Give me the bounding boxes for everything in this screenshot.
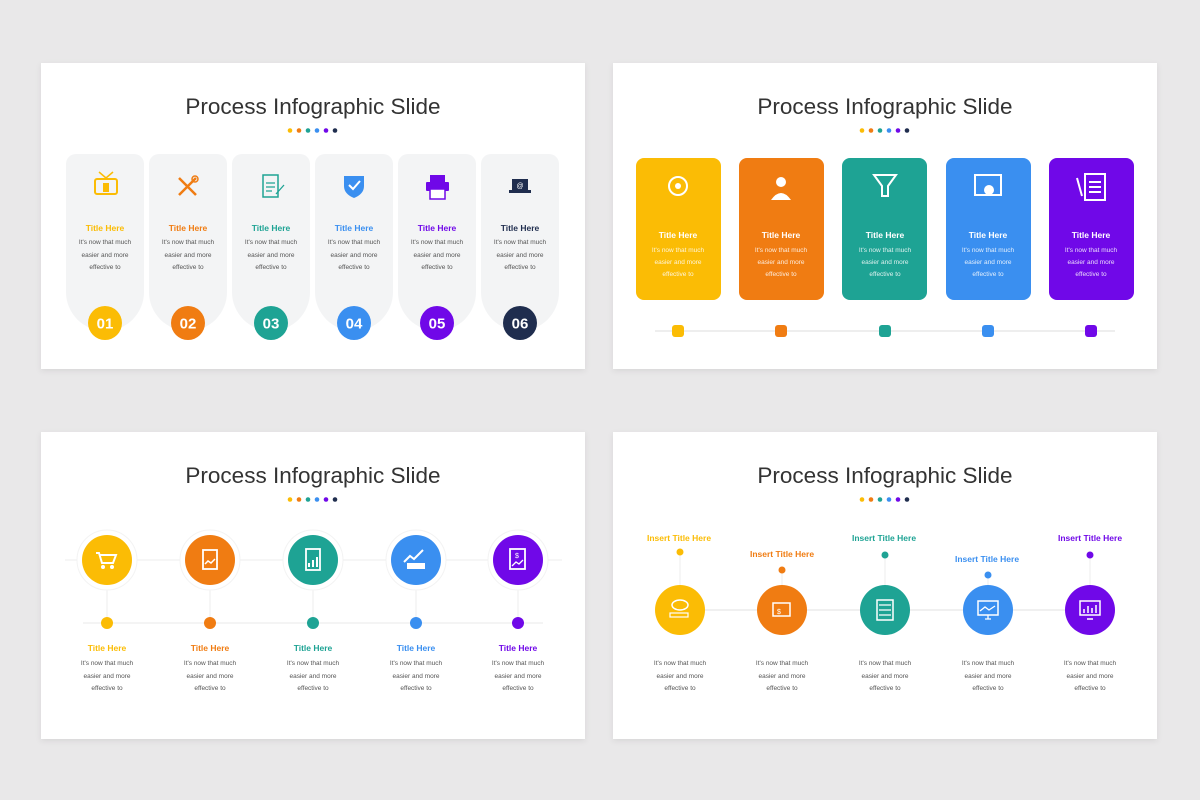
card 1 — [636, 158, 721, 337]
card 5: easier and more — [414, 252, 461, 259]
step 3: easier and more — [862, 673, 909, 680]
card 5: It's now that much — [1065, 247, 1117, 254]
step 2: easier and more — [187, 673, 234, 680]
color dots — [860, 128, 909, 133]
step 4: effective to — [400, 685, 432, 692]
step 5: It's now that much — [492, 660, 544, 667]
step 1: Insert Title Here — [647, 533, 711, 543]
card 2: 02 — [180, 316, 196, 332]
card 6: easier and more — [497, 252, 544, 259]
card 2 — [739, 158, 824, 337]
step 4 — [386, 530, 446, 692]
step 4: It's now that much — [962, 660, 1014, 667]
step 2: effective to — [766, 685, 798, 692]
card 1: easier and more — [82, 252, 129, 259]
color dots — [860, 497, 909, 502]
card 1: easier and more — [655, 259, 702, 266]
card 1: Title Here — [86, 223, 125, 233]
card 4 — [315, 154, 393, 340]
card 3 — [842, 158, 927, 337]
card 1: Title Here — [659, 230, 698, 240]
card 2: easier and more — [758, 259, 805, 266]
step 2 — [750, 549, 814, 692]
panel: slide 3 circle timeline — [41, 432, 585, 739]
step 4 — [955, 554, 1019, 692]
step 1: easier and more — [657, 673, 704, 680]
step 2: Title Here — [191, 643, 230, 653]
title: Process Infographic Slide — [185, 94, 441, 119]
card 3: Title Here — [252, 223, 291, 233]
step 2: It's now that much — [756, 660, 808, 667]
step 3: effective to — [869, 685, 901, 692]
card 5: effective to — [1075, 271, 1107, 278]
card 6: effective to — [504, 264, 536, 271]
card 6: 06 — [512, 316, 528, 332]
card 5: easier and more — [1068, 259, 1115, 266]
card 4: Title Here — [335, 223, 374, 233]
panel: slide 2 colored cards — [613, 63, 1157, 369]
step 2: It's now that much — [184, 660, 236, 667]
title: Process Infographic Slide — [185, 463, 441, 488]
card 1: It's now that much — [652, 247, 704, 254]
step 2: effective to — [194, 685, 226, 692]
card 4: It's now that much — [962, 247, 1014, 254]
card 2: effective to — [765, 271, 797, 278]
step 5: effective to — [502, 685, 534, 692]
card 4: effective to — [972, 271, 1004, 278]
step 1: effective to — [664, 685, 696, 692]
step 3: Title Here — [294, 643, 333, 653]
timeline line — [655, 330, 1115, 332]
card 4 — [946, 158, 1031, 337]
step 3: It's now that much — [287, 660, 339, 667]
card 1: 01 — [97, 316, 113, 332]
card 6: Title Here — [501, 223, 540, 233]
card 4: Title Here — [969, 230, 1008, 240]
card 5: effective to — [421, 264, 453, 271]
card 4: easier and more — [331, 252, 378, 259]
card 2: It's now that much — [755, 247, 807, 254]
card 1: It's now that much — [79, 239, 131, 246]
step 5: easier and more — [1067, 673, 1114, 680]
card 4: effective to — [338, 264, 370, 271]
card 5: 05 — [429, 316, 445, 332]
card 6 — [481, 154, 559, 340]
step 3: easier and more — [290, 673, 337, 680]
card 2: Title Here — [762, 230, 801, 240]
step 1: It's now that much — [81, 660, 133, 667]
step 5 — [488, 530, 548, 692]
step 5: It's now that much — [1064, 660, 1116, 667]
card 6: @ — [516, 183, 524, 190]
step 2 — [180, 530, 240, 692]
step 2: Insert Title Here — [750, 549, 814, 559]
card 5 — [398, 154, 476, 340]
title: Process Infographic Slide — [757, 94, 1013, 119]
card 5 — [1049, 158, 1134, 337]
step 4: It's now that much — [390, 660, 442, 667]
card 3: easier and more — [862, 259, 909, 266]
title: Process Infographic Slide — [757, 463, 1013, 488]
step 4: easier and more — [965, 673, 1012, 680]
card 2: It's now that much — [162, 239, 214, 246]
step 4: easier and more — [393, 673, 440, 680]
card 1: effective to — [89, 264, 121, 271]
card 4: It's now that much — [328, 239, 380, 246]
step 1: effective to — [91, 685, 123, 692]
card 3: It's now that much — [245, 239, 297, 246]
step 5: easier and more — [495, 673, 542, 680]
card 3: effective to — [255, 264, 287, 271]
card 3: Title Here — [866, 230, 905, 240]
color dots — [288, 128, 337, 133]
step 3 — [283, 530, 343, 692]
step 1: easier and more — [84, 673, 131, 680]
card 4: 04 — [346, 316, 363, 332]
step 5: effective to — [1074, 685, 1106, 692]
card 2: Title Here — [169, 223, 208, 233]
card 4: easier and more — [965, 259, 1012, 266]
step 3: Insert Title Here — [852, 533, 916, 543]
card 3: It's now that much — [859, 247, 911, 254]
step 1 — [647, 533, 711, 692]
step 4: Title Here — [397, 643, 436, 653]
step 4: Insert Title Here — [955, 554, 1019, 564]
step 5: Title Here — [499, 643, 538, 653]
card 3 — [232, 154, 310, 340]
card 1: effective to — [662, 271, 694, 278]
step 2: $ — [777, 609, 781, 616]
card 2: easier and more — [165, 252, 212, 259]
step 5: $ — [515, 553, 519, 560]
card 3: effective to — [869, 271, 901, 278]
card 6: It's now that much — [494, 239, 546, 246]
step 3: It's now that much — [859, 660, 911, 667]
step 1: Title Here — [88, 643, 127, 653]
panel: slide 1 numbered cards — [41, 63, 585, 369]
card 2: effective to — [172, 264, 204, 271]
step 1 — [77, 530, 137, 692]
step 3 — [852, 533, 916, 692]
step 2: easier and more — [759, 673, 806, 680]
card 3: easier and more — [248, 252, 295, 259]
card 5: It's now that much — [411, 239, 463, 246]
card 5: Title Here — [1072, 230, 1111, 240]
step 3: effective to — [297, 685, 329, 692]
step 5 — [1058, 533, 1122, 692]
step 1: It's now that much — [654, 660, 706, 667]
panel: slide 4 staggered timeline — [613, 432, 1157, 739]
card 3: 03 — [263, 316, 279, 332]
card 2 — [149, 154, 227, 340]
card 5: Title Here — [418, 223, 457, 233]
color dots — [288, 497, 337, 502]
step 4: effective to — [972, 685, 1004, 692]
card 1 — [66, 154, 144, 340]
step 5: Insert Title Here — [1058, 533, 1122, 543]
